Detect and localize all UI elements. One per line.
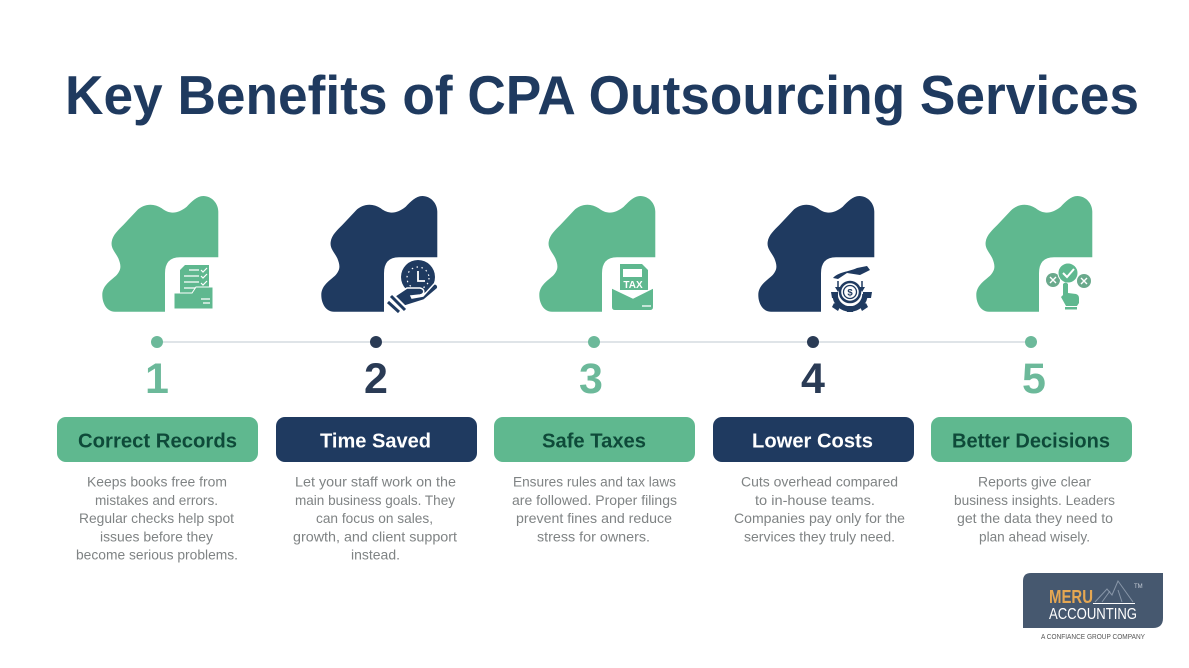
description 4: Cuts overhead compared — [741, 474, 898, 490]
description 2 — [293, 474, 457, 563]
logo: Meru Accounting: ACCOUNTING — [1049, 606, 1137, 623]
blob shape 1 — [102, 196, 218, 312]
number 3: 3 — [579, 355, 603, 403]
description 3 — [512, 474, 677, 544]
icon: hand choosing check — [1046, 263, 1091, 310]
icon: tax envelope: TAX — [623, 280, 643, 291]
description 5: plan ahead wisely. — [979, 529, 1090, 544]
panel: step 4 lower costs — [713, 196, 914, 544]
timeline dot 5 — [1025, 336, 1037, 348]
description 2: Let your staff work on the — [295, 474, 456, 490]
title: Key Benefits of CPA Outsourcing Services — [65, 64, 1139, 126]
icon: hand over dollar gear: $ — [847, 288, 853, 298]
label box 2 — [276, 417, 477, 462]
icon: document folder — [174, 265, 213, 309]
number 5: 5 — [1022, 355, 1046, 403]
description 1: Regular checks help spot — [79, 511, 234, 526]
panel: step 5 better decisions — [931, 196, 1132, 544]
description 2: instead. — [351, 548, 400, 563]
description 4 — [734, 474, 905, 544]
description 5: business insights. Leaders — [954, 493, 1115, 508]
timeline dot 2 — [370, 336, 382, 348]
panel: step 3 safe taxes — [494, 196, 695, 544]
label box 4: Lower Costs — [752, 430, 873, 452]
icon: hand over dollar gear — [831, 266, 872, 312]
label box 4 — [713, 417, 914, 462]
timeline dot 1 — [151, 336, 163, 348]
number 4: 4 — [801, 355, 825, 403]
description 3: prevent fines and reduce — [516, 511, 672, 526]
description 2: can focus on sales, — [316, 511, 433, 526]
description 1 — [76, 474, 238, 563]
logo: Meru Accounting: A CONFIANCE GROUP COMPANY — [1041, 634, 1145, 641]
label box 3: Safe Taxes — [542, 430, 646, 452]
number 2: 2 — [364, 355, 388, 403]
description 1: issues before they — [100, 529, 213, 544]
description 2: main business goals. They — [295, 493, 455, 508]
label box 3 — [494, 417, 695, 462]
description 3: Ensures rules and tax laws — [513, 474, 676, 490]
label box 1 — [57, 417, 258, 462]
panel: step 1 correct records — [57, 196, 258, 563]
blob shape 4 — [758, 196, 874, 312]
number 1: 1 — [145, 355, 169, 403]
description 4: Companies pay only for the — [734, 511, 905, 526]
blob shape 5 — [976, 196, 1092, 312]
timeline dot 4 — [807, 336, 819, 348]
icon: tax envelope — [612, 264, 653, 310]
timeline dot 3 — [588, 336, 600, 348]
label box 5 — [931, 417, 1132, 462]
description 5: get the data they need to — [957, 511, 1113, 526]
blob shape 2 — [321, 196, 437, 312]
description 4: services they truly need. — [744, 529, 895, 544]
description 1: Keeps books free from — [87, 474, 227, 490]
blob shape 3 — [539, 196, 655, 312]
logo: Meru Accounting: MERU — [1049, 587, 1093, 607]
label box 5: Better Decisions — [952, 430, 1110, 452]
logo: Meru Accounting: TM — [1134, 584, 1143, 590]
description 2: growth, and client support — [293, 529, 457, 544]
label box 1: Correct Records — [78, 430, 237, 452]
description 1: become serious problems. — [76, 548, 238, 563]
description 3: stress for owners. — [537, 529, 650, 544]
logo: Meru Accounting — [1023, 573, 1163, 641]
description 5 — [954, 474, 1115, 544]
description 3: are followed. Proper filings — [512, 493, 677, 508]
description 1: mistakes and errors. — [95, 493, 218, 508]
label box 2: Time Saved — [320, 430, 431, 452]
description 4: to in-house teams. — [755, 493, 875, 508]
icon: hand holding clock — [388, 260, 438, 312]
description 5: Reports give clear — [978, 474, 1091, 490]
panel: step 2 time saved — [276, 196, 477, 563]
